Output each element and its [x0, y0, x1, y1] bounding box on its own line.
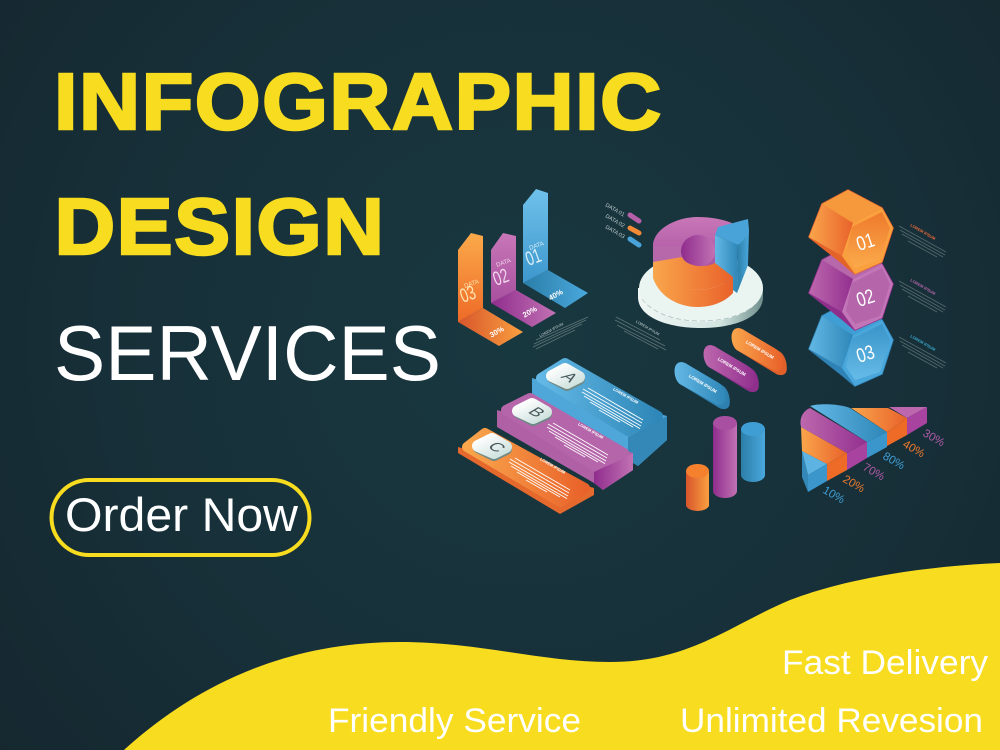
label 80%: 80% — [881, 450, 906, 472]
chart legend: DATA 01 — [604, 203, 625, 218]
hexagon 01 — [809, 190, 893, 274]
cylinder orange — [686, 464, 709, 511]
orange slice — [653, 257, 733, 307]
pill orange: LOREM IPSUM — [745, 339, 775, 360]
hexagon 03 — [809, 302, 893, 386]
purple slice — [653, 217, 732, 272]
donut chart on plate — [604, 203, 763, 350]
order now button — [52, 480, 310, 555]
slab c — [458, 433, 594, 514]
label 30%: 30% — [921, 427, 946, 449]
bar chart caption — [533, 317, 588, 349]
plate — [638, 254, 763, 328]
slab b: B — [524, 405, 550, 420]
order now button: Order Now — [65, 488, 299, 541]
slab a: LOREM IPSUM — [612, 386, 640, 405]
bar: data 03: 30% — [488, 324, 506, 339]
title: design: DESIGN — [54, 183, 385, 272]
hexagon stack — [809, 190, 946, 386]
bar: data 02: DATA — [496, 258, 512, 269]
title: services: SERVICES — [54, 309, 441, 397]
hexagon 02 — [809, 246, 893, 330]
bar: data 01: 01 — [523, 244, 544, 270]
hexagon 02 caption: LOREM IPSUM — [910, 278, 937, 296]
title: infographic: INFOGRAPHIC — [54, 57, 663, 146]
label 40%: 40% — [901, 438, 926, 460]
hexagon 01 caption: LOREM IPSUM — [910, 223, 937, 241]
bar: data 02 — [490, 233, 556, 327]
hexagon 01: 01 — [854, 229, 877, 255]
bar: data 02: 20% — [521, 304, 539, 319]
donut caption: LOREM IPSUM — [635, 320, 660, 337]
banner text: unlimited revesion: Unlimited Revesion — [680, 702, 983, 740]
label 20%: 20% — [841, 473, 866, 495]
step 80% blue — [810, 404, 887, 458]
pill purple: LOREM IPSUM — [717, 356, 747, 377]
bar: data 02: 02 — [490, 264, 512, 290]
bar chart caption: LOREM IPSUM — [539, 322, 564, 338]
bar: data 03: DATA — [464, 279, 480, 290]
label 10%: 10% — [821, 484, 846, 506]
slab a — [532, 363, 667, 466]
step 20% orange — [801, 427, 847, 481]
pill blue: LOREM IPSUM — [688, 373, 718, 394]
yellow wave banner — [124, 563, 1000, 750]
banner text: friendly service: Friendly Service — [328, 702, 581, 740]
step 40% orange — [851, 408, 907, 446]
hexagon 03: 03 — [854, 341, 877, 367]
label 70%: 70% — [861, 461, 886, 483]
step 10% blue — [802, 451, 827, 492]
step 70% purple — [800, 408, 867, 470]
bar: data 01 — [523, 189, 588, 308]
bar: data 01: DATA — [529, 241, 545, 252]
L-shaped 3D bar chart — [457, 189, 588, 349]
slab c: C — [483, 439, 510, 455]
step 30% purple — [889, 407, 927, 435]
slab c: LOREM IPSUM — [539, 456, 567, 475]
hexagon 03 caption — [899, 334, 946, 368]
chart legend: DATA 03 — [604, 225, 625, 240]
hexagon 02: 02 — [854, 285, 877, 311]
cylinder blue — [741, 422, 765, 482]
isometric option slabs — [458, 363, 667, 514]
chart legend — [604, 203, 639, 245]
cylinder purple — [713, 416, 737, 498]
slab a: A — [557, 370, 583, 385]
slab b: LOREM IPSUM — [577, 421, 605, 440]
blue slice — [715, 219, 749, 293]
banner text: fast delivery: Fast Delivery — [782, 644, 988, 682]
hexagon 03 caption: LOREM IPSUM — [910, 334, 937, 352]
hexagon 02 caption — [899, 278, 946, 312]
bar: data 03: 03 — [457, 281, 479, 307]
chart legend: DATA 02 — [604, 214, 625, 229]
bar: data 03 — [457, 233, 523, 346]
donut caption — [615, 317, 666, 350]
isometric pills — [675, 328, 787, 409]
bar: data 01: 40% — [547, 287, 565, 302]
cylinder chart — [686, 416, 765, 511]
hexagon 01 caption — [899, 223, 946, 257]
stepped percentage chart — [800, 404, 946, 506]
slab b — [497, 398, 633, 490]
